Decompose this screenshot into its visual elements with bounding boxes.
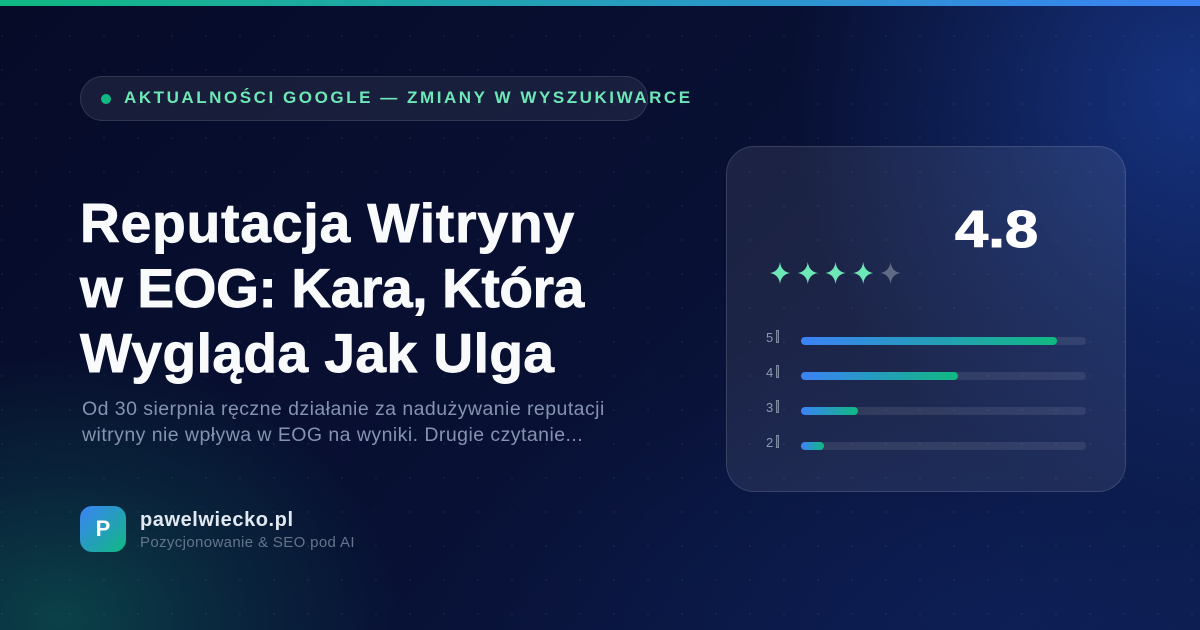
top gradient bar [0, 0, 1200, 6]
brand logo [80, 506, 126, 552]
brand logo: P [96, 516, 110, 541]
title: Reputacja Witryny [80, 192, 575, 254]
label 4: 4 [766, 365, 773, 380]
rating row 4 [766, 365, 1086, 380]
brand tagline: Pozycjonowanie & SEO pod AI [140, 534, 355, 551]
track 3 [801, 407, 1086, 415]
track 2 [801, 442, 1086, 450]
label 3 [766, 400, 779, 415]
label 2 [766, 435, 779, 450]
badge text: AKTUALNOŚCI GOOGLE — ZMIANY W WYSZUKIWARCE [124, 88, 693, 107]
rating row 2 [766, 435, 1086, 450]
label 3: 3 [766, 400, 773, 415]
rating card [726, 146, 1126, 492]
rating row 5 [766, 330, 1086, 345]
subtitle [82, 398, 605, 446]
star rating [770, 262, 900, 284]
label 4 [766, 365, 779, 380]
title [79, 192, 586, 384]
rating score: 4.8 [955, 201, 1038, 259]
label 5: 5 [766, 330, 773, 345]
track 5 [801, 337, 1086, 345]
title: Wygląda Jak Ulga [80, 322, 555, 384]
label 5 [766, 330, 779, 345]
rating row 3 [766, 400, 1086, 415]
track 4 [801, 372, 1086, 380]
subtitle: witryny nie wpływa w EOG na wyniki. Drugie czytanie... [82, 424, 583, 446]
badge: category pill [80, 76, 648, 121]
brand name: pawelwiecko.pl [140, 509, 294, 531]
title: w EOG: Kara, Która [80, 257, 584, 319]
label 2: 2 [766, 435, 773, 450]
brand block [80, 506, 355, 552]
badge dot [101, 94, 111, 104]
subtitle: Od 30 sierpnia ręczne działanie za nadużywanie reputacji [82, 398, 605, 420]
